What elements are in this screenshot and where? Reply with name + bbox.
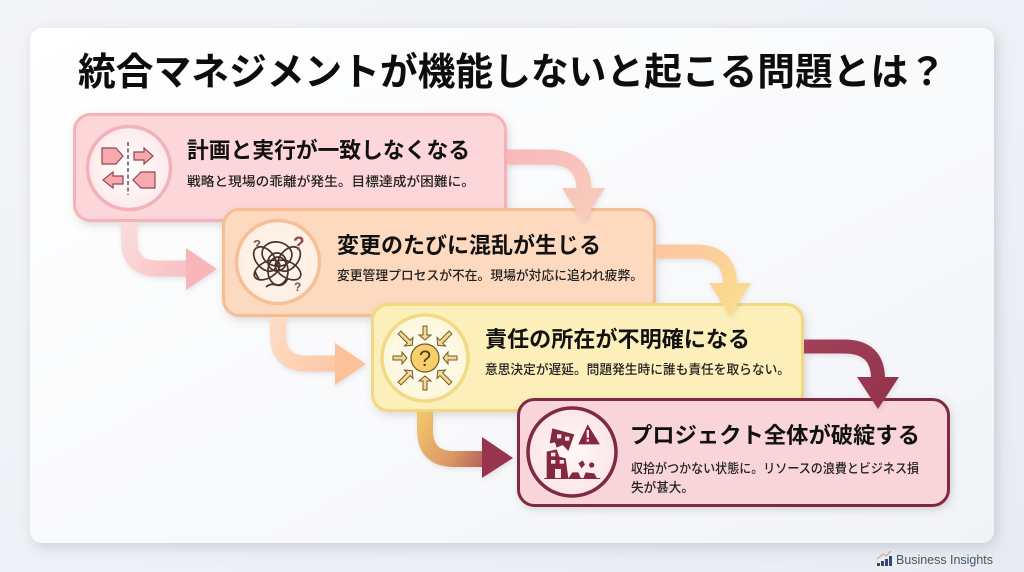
title: 統合マネジメントが機能しないと起こる問題とは？ <box>78 52 946 94</box>
panel: step 4 <box>518 400 948 506</box>
panel: step 1 <box>74 114 506 220</box>
heading: step 2: 変更のたびに混乱が生じる <box>337 233 601 258</box>
panel: step 2 <box>224 210 654 316</box>
arrow: step 2 down to step 3 <box>278 317 366 385</box>
question marks: ? <box>293 234 305 255</box>
heading: step 4: プロジェクト全体が破綻する <box>630 423 920 448</box>
description: step 1: 戦略と現場の乖離が発生。目標達成が困難に。 <box>187 174 475 189</box>
arrow: step 3 right to step 4 <box>804 346 899 409</box>
heading: step 1: 計画と実行が一致しなくなる <box>187 138 470 163</box>
logo: Business Insights: Business Insights <box>896 553 993 567</box>
icon: collapsing building <box>528 408 616 496</box>
icon: unclear responsibility: ? <box>419 346 431 371</box>
heading: step 3: 責任の所在が不明確になる <box>485 327 750 352</box>
icon: misaligned plan and execution <box>88 126 170 210</box>
question marks: ? <box>253 237 261 252</box>
arrow: step 2 right to step 3 <box>656 252 751 316</box>
description: step 4: 失が甚大。 <box>631 480 694 495</box>
icon: tangled confusion <box>236 220 320 304</box>
arrow: step 1 right to step 2 <box>507 157 605 222</box>
description: step 4: 収拾がつかない状態に。リソースの浪費とビジネス損 <box>631 461 919 476</box>
question marks: ? <box>294 280 301 294</box>
description: step 4 <box>631 461 919 495</box>
icon: unclear responsibility <box>382 315 468 401</box>
description: step 2: 変更管理プロセスが不在。現場が対応に追われ疲弊。 <box>337 268 643 283</box>
panel: step 3 <box>372 304 802 410</box>
arrow: step 1 down to step 2 <box>129 222 217 290</box>
arrow: step 3 down to step 4 <box>425 412 513 478</box>
question marks <box>253 234 305 294</box>
description: step 3: 意思決定が遅延。問題発生時に誰も責任を取らない。 <box>485 362 790 377</box>
